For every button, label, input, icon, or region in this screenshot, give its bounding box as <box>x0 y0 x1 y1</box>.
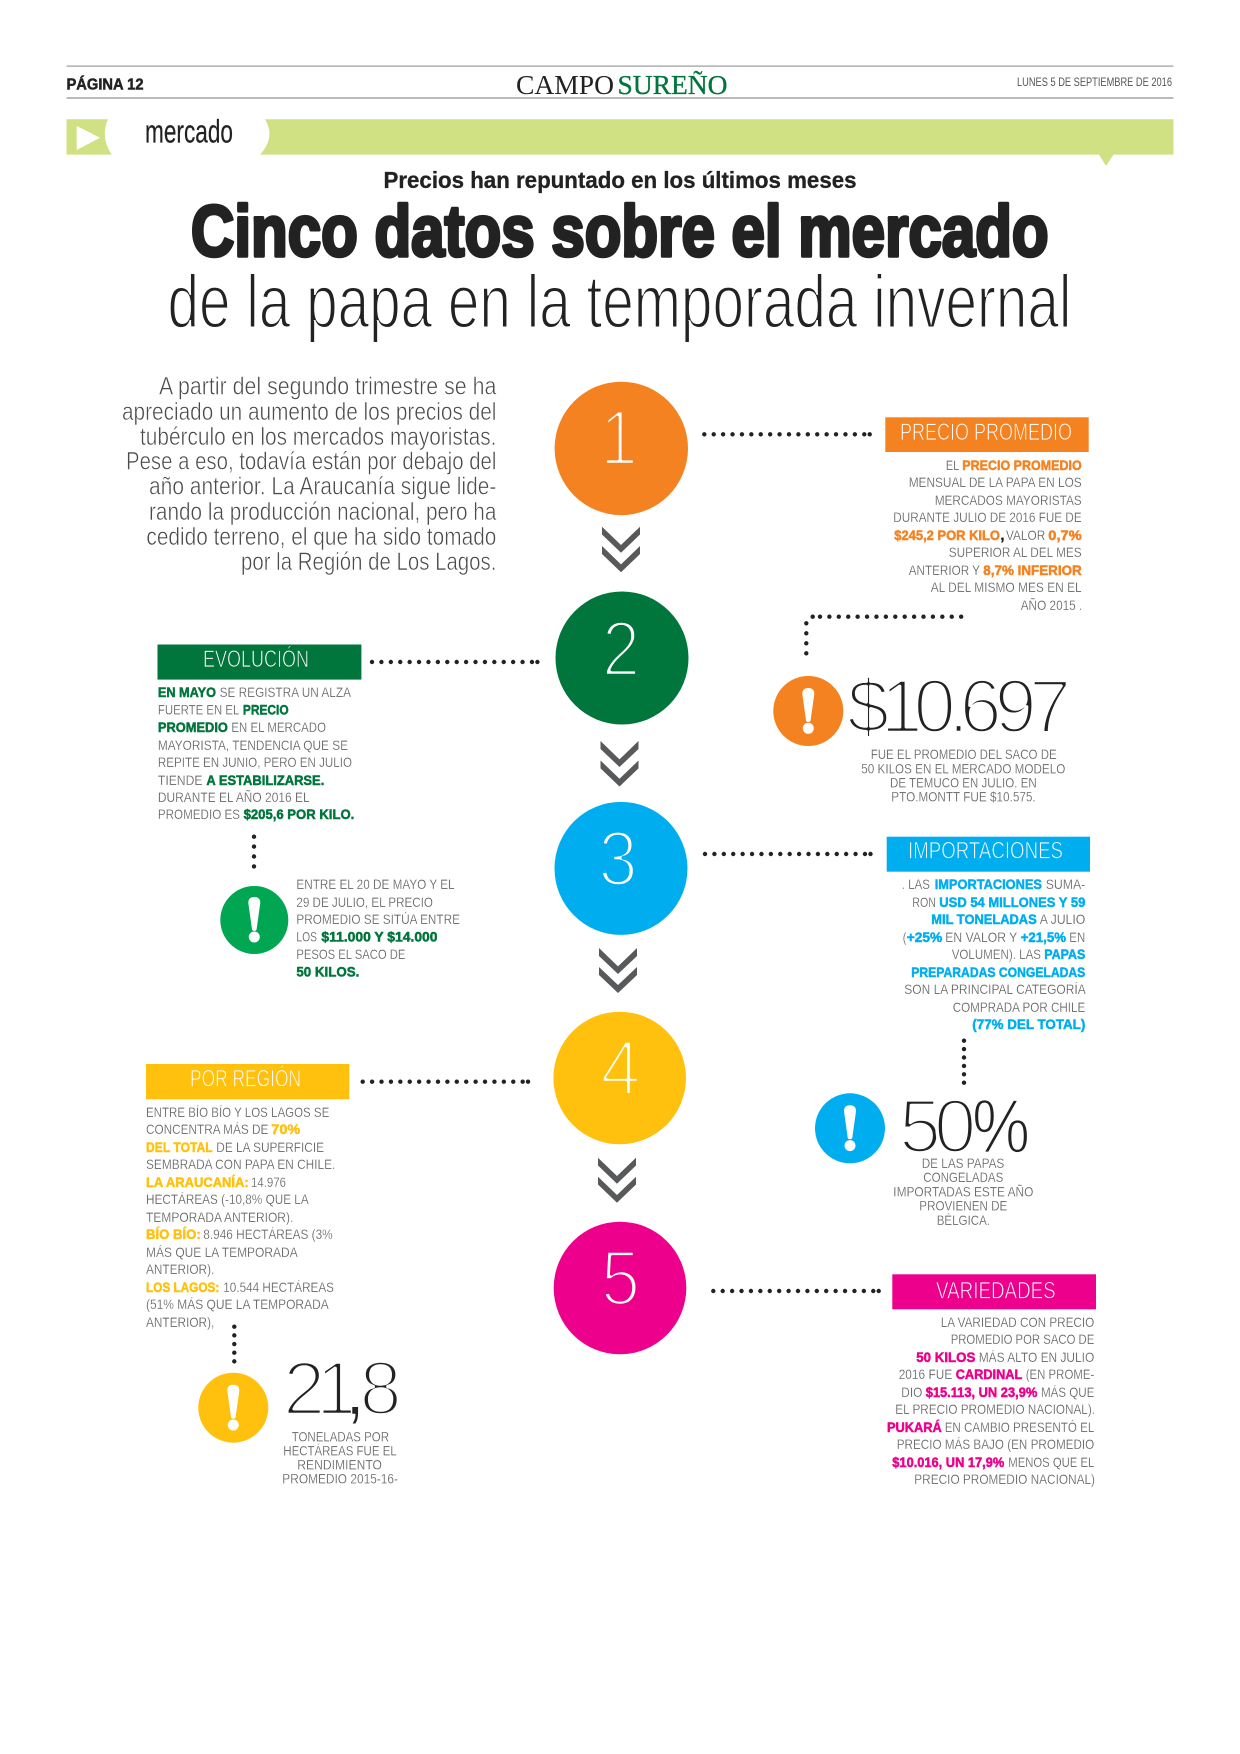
circle 3: 3 <box>598 814 638 902</box>
text: por region: MÁS QUE LA TEMPORADA <box>146 1244 298 1260</box>
connector 2 <box>372 660 540 664</box>
text: precio promedio: MERCADOS MAYORISTAS <box>935 492 1082 508</box>
connector: importaciones to callout <box>962 1041 966 1083</box>
caption: 50%: PROVIENEN DE <box>919 1198 1007 1214</box>
intro paragraph <box>122 373 496 576</box>
intro paragraph: apreciado un aumento de los precios del <box>122 398 496 426</box>
big number: 21,8: , <box>344 1346 366 1432</box>
heading: evolucion: EVOLUCIÓN <box>203 646 309 673</box>
text: evolucion: EN EL MERCADO <box>231 719 326 735</box>
big number: 21,8: 8 <box>360 1346 402 1432</box>
text: variedades: MÁS QUE <box>1041 1384 1094 1400</box>
heading: por region <box>146 1064 349 1099</box>
text: precio promedio: , <box>1000 527 1004 543</box>
circle 1: 1 <box>600 394 638 482</box>
text: variedades: MENOS QUE EL <box>1008 1454 1094 1470</box>
caption: $10.697: 50 KILOS EN EL MERCADO MODELO <box>861 760 1065 776</box>
arrow 3 to 4 <box>599 948 637 993</box>
caption: 21,8: RENDIMIENTO <box>297 1457 382 1473</box>
panel: importaciones <box>815 837 1090 1228</box>
text: por region: 10.544 HECTÁREAS <box>223 1279 334 1295</box>
text: por region: 70% <box>271 1121 301 1137</box>
caption: $10.697: FUE EL PROMEDIO DEL SACO DE <box>871 746 1057 762</box>
caption: 21,8: PROMEDIO 2015-16- <box>282 1471 398 1487</box>
text: importaciones: SON LA PRINCIPAL CATEGORÍA <box>904 981 1086 997</box>
text: importaciones <box>902 876 1086 1032</box>
big number: 50%: 50 <box>899 1084 976 1170</box>
circle 3 <box>554 802 688 935</box>
heading: variedades: VARIEDADES <box>936 1277 1056 1304</box>
arrow 1 to 2 <box>602 527 640 572</box>
big number: 50% <box>899 1084 1030 1170</box>
text: por region: TEMPORADA ANTERIOR). <box>146 1209 293 1225</box>
circle 4 <box>553 1012 686 1144</box>
text: precio promedio: $245,2 POR KILO <box>894 527 1000 543</box>
text: importaciones: USD 54 MILLONES Y 59 <box>939 894 1085 910</box>
text: variedades: EL PRECIO PROMEDIO NACIONAL). <box>895 1401 1095 1417</box>
section name: mercado <box>145 113 233 149</box>
arrow 4 to 5 <box>598 1158 636 1203</box>
circle 5: 5 <box>601 1234 640 1322</box>
big number: 50%: % <box>972 1084 1030 1170</box>
text: precio promedio: AÑO 2015 . <box>1021 597 1082 613</box>
big number: 21,8 <box>283 1346 402 1432</box>
heading: por region: POR REGIÓN <box>190 1066 301 1093</box>
callout text: evolucion: 50 KILOS. <box>296 964 359 980</box>
connector 4 <box>363 1080 530 1084</box>
text: evolucion: SE REGISTRA UN ALZA <box>220 684 352 700</box>
newspaper name <box>516 70 728 100</box>
text: evolucion: DURANTE EL AÑO 2016 EL <box>158 789 310 805</box>
text: variedades: LA VARIEDAD CON PRECIO <box>941 1314 1094 1330</box>
text: precio promedio <box>893 457 1082 613</box>
connector 1 <box>704 432 872 436</box>
text: por region: ANTERIOR). <box>146 1261 214 1277</box>
title: Cinco datos sobre el mercado <box>191 192 1049 272</box>
intro paragraph: A partir del segundo trimestre se ha <box>159 373 496 401</box>
icon: orange alert <box>773 676 843 746</box>
text: evolucion: EN MAYO <box>158 684 216 700</box>
text: importaciones: MIL TONELADAS <box>931 911 1037 927</box>
text: precio promedio: PRECIO PROMEDIO <box>962 457 1082 473</box>
page number: PÁGINA 12 <box>66 74 144 94</box>
text: por region: LOS LAGOS: <box>146 1279 219 1295</box>
newspaper header <box>66 66 1174 100</box>
text: importaciones: PAPAS <box>1044 946 1085 962</box>
connector: evolucion to callout <box>252 837 256 867</box>
text: evolucion: A ESTABILIZARSE. <box>206 772 324 788</box>
big number: $10.697: $10.697 <box>847 664 1071 750</box>
text: importaciones: +25% <box>907 929 943 945</box>
text: precio promedio: DURANTE JULIO DE 2016 FUE DE <box>893 509 1082 525</box>
circle 2 <box>556 592 688 724</box>
text: precio promedio: EL <box>946 457 959 473</box>
text: evolucion <box>158 684 354 822</box>
text: variedades: PRECIO PROMEDIO NACIONAL) <box>914 1471 1095 1487</box>
text: por region: 8.946 HECTÁREAS (3% <box>203 1226 333 1242</box>
text: variedades: $15.113, UN 23,9% <box>926 1384 1038 1400</box>
text: evolucion: FUERTE EN EL <box>158 702 239 718</box>
text: por region: BÍO BÍO: <box>146 1226 201 1242</box>
text: por region: SEMBRADA CON PAPA EN CHILE. <box>146 1156 335 1172</box>
text: variedades: PROMEDIO POR SACO DE <box>951 1331 1094 1347</box>
text: por region: HECTÁREAS (-10,8% QUE LA <box>146 1191 309 1207</box>
circle 1 <box>555 382 688 515</box>
text: precio promedio: 8,7% INFERIOR <box>983 562 1082 578</box>
connector: precio to callout <box>806 614 965 663</box>
text: por region: DE LA SUPERFICIE <box>216 1139 324 1155</box>
text: variedades: CARDINAL <box>956 1366 1023 1382</box>
text: importaciones: ( <box>903 929 907 945</box>
intro paragraph: rando la producción nacional, pero ha <box>149 498 496 526</box>
text: por region: ANTERIOR), <box>146 1314 214 1330</box>
text: por region: 14.976 <box>251 1174 286 1190</box>
text: por region: ENTRE BÍO BÍO Y LOS LAGOS SE <box>146 1104 329 1120</box>
callout text: evolucion: LOS <box>296 929 317 945</box>
text: variedades: PRECIO MÁS BAJO (EN PROMEDIO <box>897 1436 1094 1452</box>
caption: $10.697: DE TEMUCO EN JULIO. EN <box>890 774 1037 790</box>
caption: $10.697 <box>861 746 1065 805</box>
big number: 21,8: 21 <box>283 1346 358 1432</box>
heading: importaciones <box>887 837 1090 872</box>
text: importaciones: COMPRADA POR CHILE <box>953 999 1085 1015</box>
text: variedades: (EN PROME- <box>1026 1366 1095 1382</box>
caption: 21,8: HECTÁREAS FUE EL <box>283 1443 397 1459</box>
intro paragraph: año anterior. La Araucanía sigue lide- <box>149 473 496 501</box>
text: evolucion: PROMEDIO ES <box>158 806 240 822</box>
text: importaciones: . LAS <box>902 876 930 892</box>
heading: precio promedio: PRECIO PROMEDIO <box>900 419 1072 446</box>
text: variedades: DIO <box>901 1384 922 1400</box>
text: por region: DEL TOTAL <box>146 1139 213 1155</box>
callout text: evolucion: PROMEDIO SE SITÚA ENTRE <box>296 911 460 927</box>
text: evolucion: PRECIO <box>243 702 289 718</box>
text: importaciones: VOLUMEN). LAS <box>952 946 1041 962</box>
panel: precio promedio <box>773 417 1089 805</box>
text: importaciones: PREPARADAS CONGELADAS <box>911 964 1085 980</box>
text: importaciones: A JULIO <box>1040 911 1085 927</box>
text: precio promedio: VALOR <box>1006 527 1045 543</box>
circle 4: 4 <box>600 1024 640 1112</box>
heading: precio promedio <box>885 417 1089 452</box>
text: evolucion: MAYORISTA, TENDENCIA QUE SE <box>158 737 348 753</box>
text: por region: CONCENTRA MÁS DE <box>146 1121 268 1137</box>
date: LUNES 5 DE SEPTIEMBRE DE 2016 <box>1017 77 1172 89</box>
connector: region to callout <box>232 1327 237 1362</box>
text: precio promedio: ANTERIOR Y <box>909 562 981 578</box>
circle 5 <box>554 1222 686 1354</box>
kicker: Precios han repuntado en los últimos meses <box>384 167 856 193</box>
panel: por region <box>146 1064 402 1487</box>
text: variedades: $10.016, UN 17,9% <box>892 1454 1005 1470</box>
newspaper name: CAMPO <box>516 70 614 100</box>
text: por region: (51% MÁS QUE LA TEMPORADA <box>146 1296 329 1312</box>
text: precio promedio: SUPERIOR AL DEL MES <box>949 544 1082 560</box>
circle 2: 2 <box>602 604 640 692</box>
text: variedades: 50 KILOS <box>916 1349 975 1365</box>
text: variedades: MÁS ALTO EN JULIO <box>979 1349 1094 1365</box>
text: precio promedio: 0,7% <box>1048 527 1082 543</box>
text: evolucion: $205,6 POR KILO. <box>244 806 354 822</box>
text: por region: LA ARAUCANÍA: <box>146 1174 249 1190</box>
callout text: evolucion <box>296 876 460 980</box>
caption: 21,8 <box>282 1429 398 1487</box>
caption: $10.697: PTO.MONTT FUE $10.575. <box>891 789 1036 805</box>
text: evolucion: TIENDE <box>158 772 202 788</box>
caption: 21,8: TONELADAS POR <box>292 1429 389 1445</box>
text: variedades: PUKARÁ <box>887 1419 942 1435</box>
caption: 50%: BÉLGICA. <box>937 1212 990 1228</box>
text: variedades: EN CAMBIO PRESENTÓ EL <box>945 1419 1094 1435</box>
text: precio promedio: MENSUAL DE LA PAPA EN LOS <box>909 474 1082 490</box>
intro paragraph: por la Región de Los Lagos. <box>241 548 496 576</box>
heading: variedades <box>892 1274 1096 1309</box>
callout text: evolucion: 29 DE JULIO, EL PRECIO <box>296 894 433 910</box>
intro paragraph: cedido terreno, el que ha sido tomado <box>146 523 496 551</box>
newspaper name: SUREÑO <box>618 70 728 100</box>
connector 5 <box>713 1289 881 1293</box>
text: importaciones: IMPORTACIONES <box>935 876 1042 892</box>
text: importaciones: EN <box>1069 929 1085 945</box>
arrow 2 to 3 <box>600 741 638 786</box>
caption: 50%: CONGELADAS <box>923 1169 1003 1185</box>
callout text: evolucion: $11.000 Y $14.000 <box>321 929 438 945</box>
text: importaciones: SUMA- <box>1046 876 1086 892</box>
text: por region <box>146 1104 335 1330</box>
caption: 50%: IMPORTADAS ESTE AÑO <box>893 1184 1033 1200</box>
text: variedades: 2016 FUE <box>899 1366 952 1382</box>
text: importaciones: EN VALOR Y <box>945 929 1018 945</box>
text: variedades <box>887 1314 1095 1487</box>
section band: mercado <box>66 113 1174 166</box>
heading: importaciones: IMPORTACIONES <box>908 838 1063 865</box>
icon: green alert <box>220 886 288 954</box>
callout text: evolucion: ENTRE EL 20 DE MAYO Y EL <box>296 876 455 892</box>
intro paragraph: tubérculo en los mercados mayoristas. <box>140 423 496 451</box>
text: importaciones: (77% DEL TOTAL) <box>972 1016 1085 1032</box>
icon: blue alert <box>815 1093 885 1163</box>
icon: yellow alert <box>198 1373 268 1443</box>
callout text: evolucion: PESOS EL SACO DE <box>296 946 405 962</box>
text: evolucion: REPITE EN JUNIO, PERO EN JULIO <box>158 754 352 770</box>
title <box>168 192 1072 344</box>
caption: 50% <box>893 1155 1033 1228</box>
caption: 50%: DE LAS PAPAS <box>922 1155 1004 1171</box>
text: importaciones: RON <box>912 894 936 910</box>
panel: variedades <box>887 1274 1096 1487</box>
intro paragraph: Pese a eso, todavía están por debajo del <box>126 448 496 476</box>
text: precio promedio: AL DEL MISMO MES EN EL <box>931 579 1082 595</box>
connector 3 <box>705 852 873 856</box>
heading: evolucion <box>158 644 361 680</box>
text: importaciones: +21,5% <box>1021 929 1067 945</box>
text: evolucion: PROMEDIO <box>158 719 228 735</box>
panel: evolucion <box>158 644 460 980</box>
